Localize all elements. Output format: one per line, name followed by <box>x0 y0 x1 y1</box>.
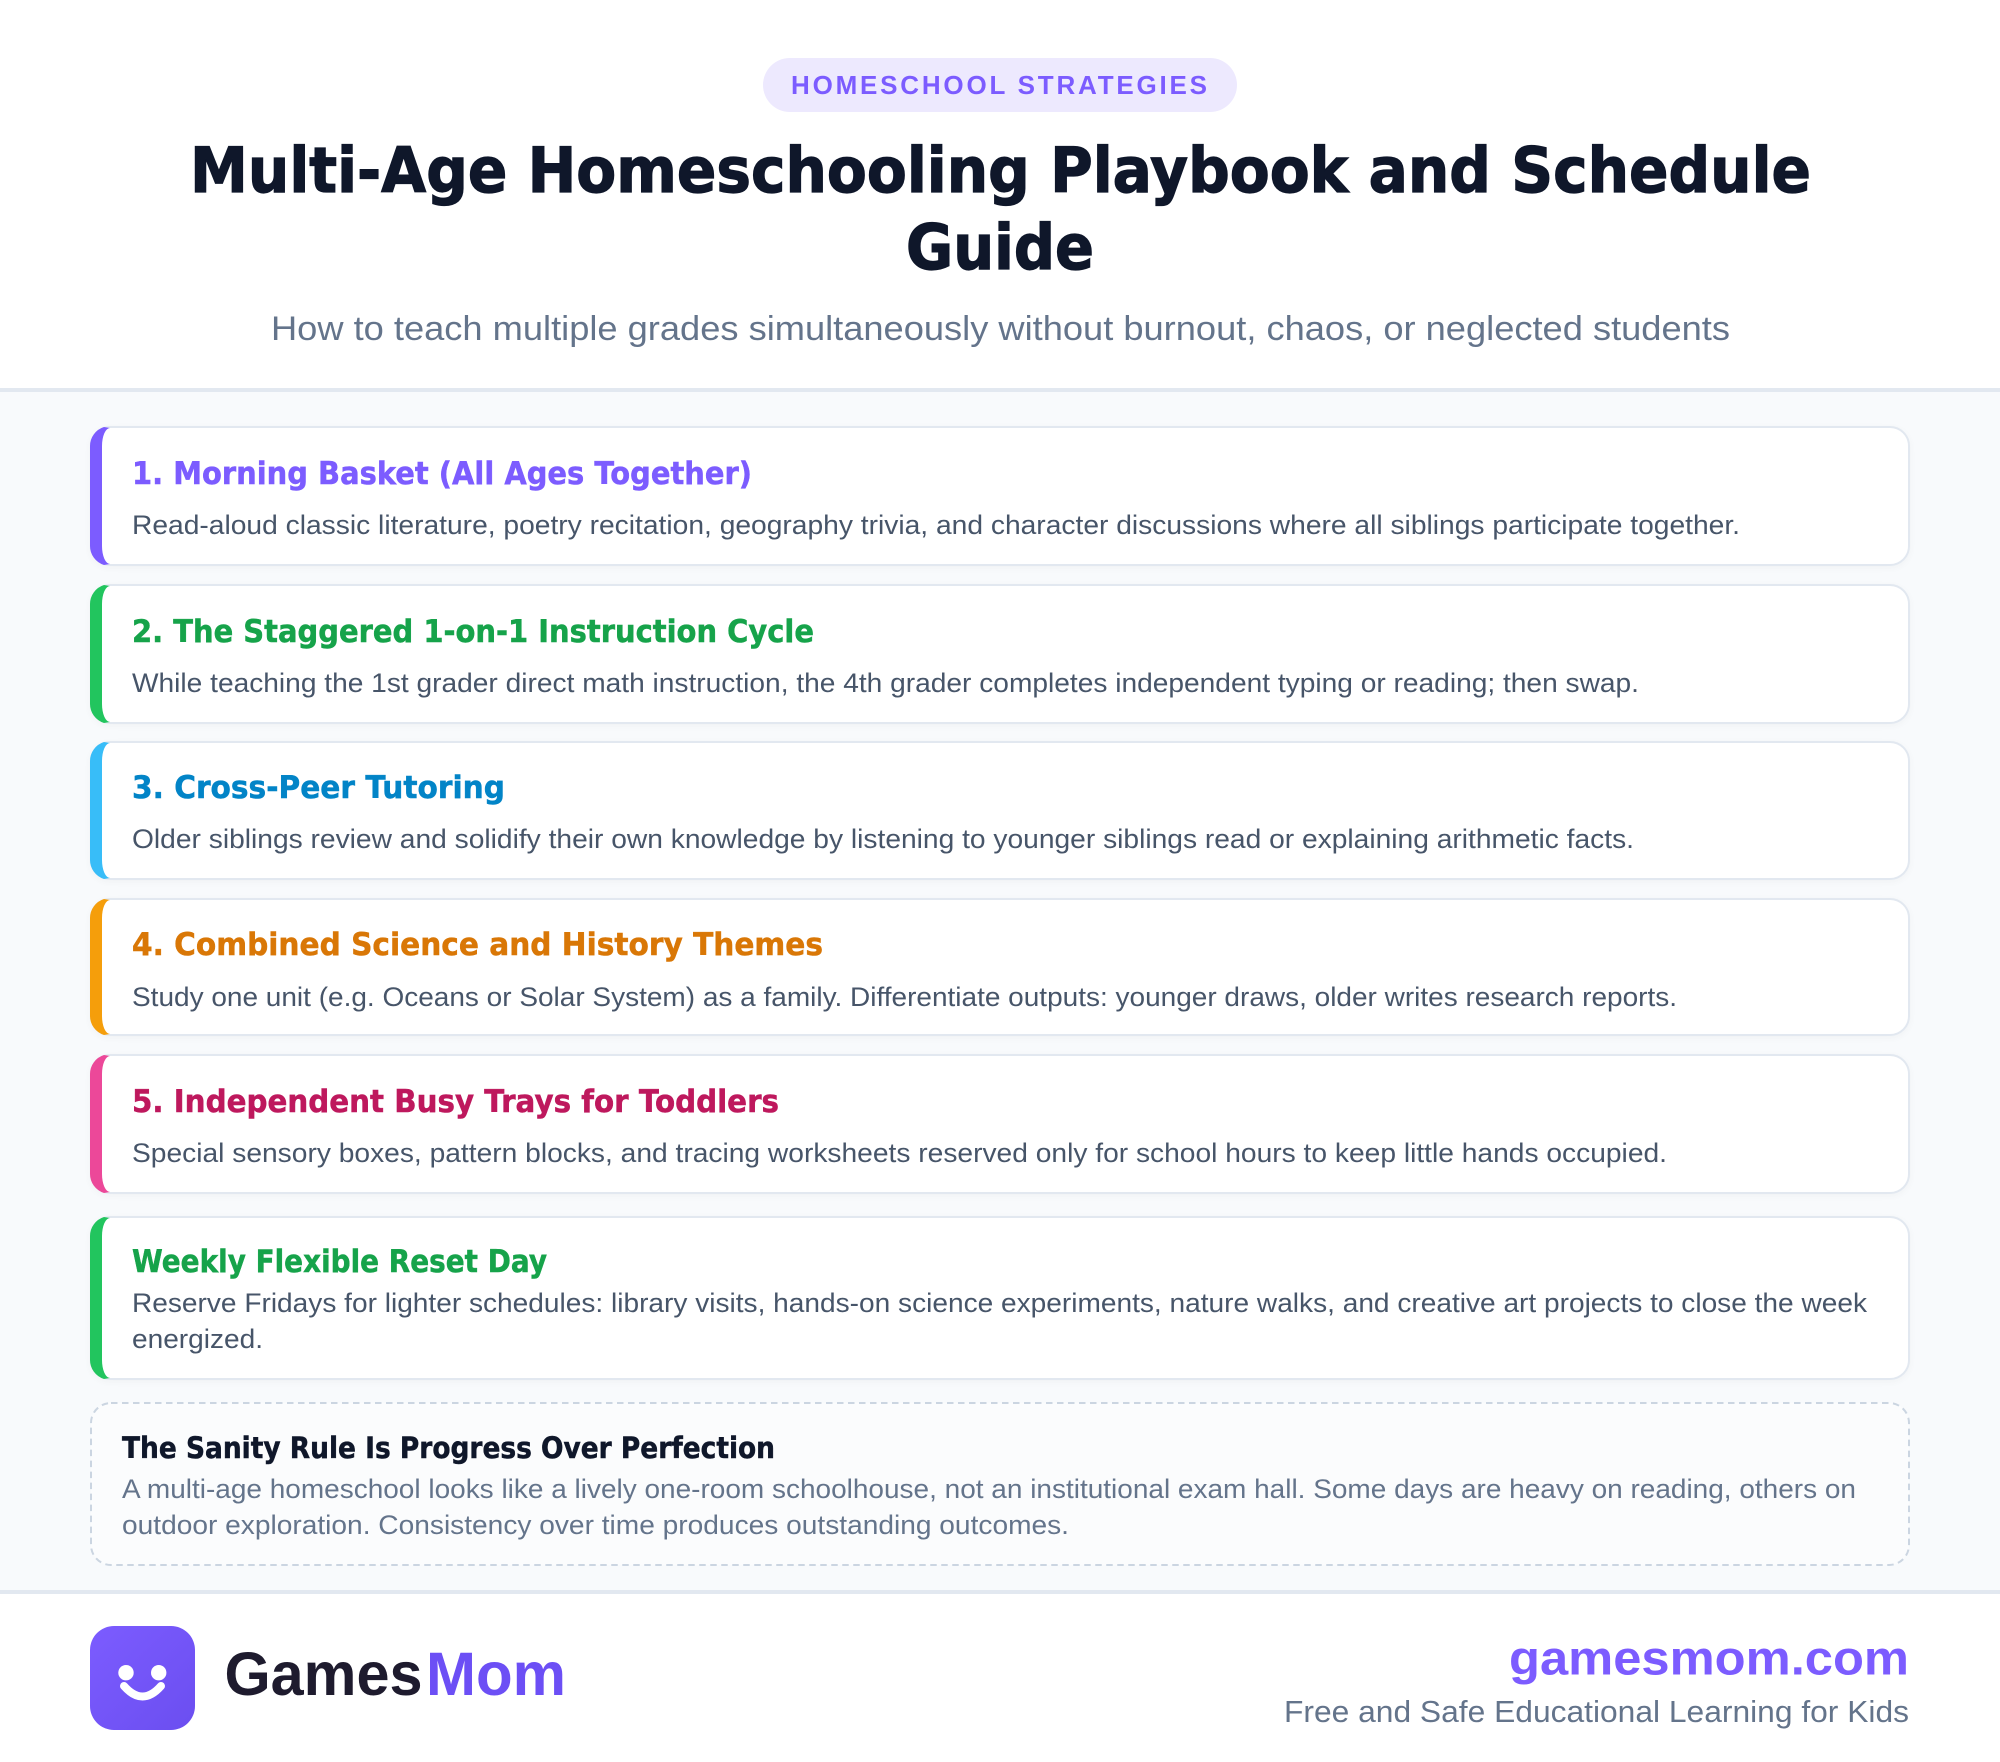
tagline: Free and Safe Educational Learning for Kids <box>1284 1694 1909 1729</box>
website url: gamesmom.com <box>1509 1632 1909 1686</box>
card 1 accent bar <box>90 427 110 565</box>
card 3 heading: 3. Cross-Peer Tutoring <box>132 770 505 806</box>
card 5 heading: 5. Independent Busy Trays for Toddlers <box>132 1084 779 1120</box>
card 2 description: While teaching the 1st grader direct math instruction, the 4th grader completes independent typing or reading; then swap. <box>132 668 1639 698</box>
icon: smiling logo <box>90 1626 195 1730</box>
callout: sanity rule <box>90 1402 1910 1566</box>
callout body: outdoor exploration. Consistency over time produces outstanding outcomes. <box>122 1510 1069 1540</box>
card 6 description: Reserve Fridays for lighter schedules: library visits, hands-on science experiments, nature walks, and creative art projects to close the week <box>132 1288 1868 1318</box>
card 6 heading: Weekly Flexible Reset Day <box>132 1244 547 1280</box>
callout body <box>122 1474 1856 1540</box>
callout dashed frame <box>91 1403 1909 1565</box>
title <box>190 134 1811 284</box>
card 3 description: Older siblings review and solidify their own knowledge by listening to younger siblings read or explaining arithmetic facts. <box>132 824 1634 854</box>
brand name: Mom <box>426 1640 566 1708</box>
card 6 accent bar <box>90 1217 110 1379</box>
card 5: busy trays <box>90 1054 1910 1194</box>
title: Multi-Age Homeschooling Playbook and Schedule <box>190 134 1811 207</box>
card 1: morning basket <box>90 426 1910 566</box>
card 1 heading: 1. Morning Basket (All Ages Together) <box>132 456 752 492</box>
header panel <box>0 0 2000 392</box>
card 4: combined themes <box>90 898 1910 1036</box>
subtitle: How to teach multiple grades simultaneously without burnout, chaos, or neglected students <box>271 310 1730 348</box>
card 2 heading: 2. The Staggered 1-on-1 Instruction Cycle <box>132 614 814 650</box>
title: Guide <box>906 211 1094 284</box>
card 6 description <box>132 1288 1868 1354</box>
callout heading: The Sanity Rule Is Progress Over Perfection <box>122 1431 775 1465</box>
footer panel <box>0 1590 2000 1762</box>
card 2 accent bar <box>90 585 110 723</box>
card 6 description: energized. <box>132 1324 263 1354</box>
badge: homeschool strategies <box>763 58 1237 112</box>
card 3: cross-peer tutoring <box>90 741 1910 880</box>
card 5 accent bar <box>90 1055 110 1193</box>
callout body: A multi-age homeschool looks like a lively one-room schoolhouse, not an institutional exam hall. Some days are heavy on reading, others on <box>122 1474 1856 1504</box>
card 2: staggered instruction <box>90 584 1910 724</box>
card 5 description: Special sensory boxes, pattern blocks, and tracing worksheets reserved only for school hours to keep little hands occupied. <box>132 1138 1667 1168</box>
brand name <box>224 1640 566 1708</box>
card 4 heading: 4. Combined Science and History Themes <box>132 927 823 963</box>
brand name: Games <box>224 1640 422 1708</box>
card 4 accent bar <box>90 899 110 1035</box>
card 6: weekly reset day <box>90 1216 1910 1380</box>
card 4 description: Study one unit (e.g. Oceans or Solar System) as a family. Differentiate outputs: younger draws, older writes research reports. <box>132 982 1677 1012</box>
card 1 description: Read-aloud classic literature, poetry recitation, geography trivia, and character discussions where all siblings participate together. <box>132 510 1740 540</box>
badge: homeschool strategies: HOMESCHOOL STRATEGIES <box>791 70 1207 100</box>
card 3 accent bar <box>90 742 110 879</box>
